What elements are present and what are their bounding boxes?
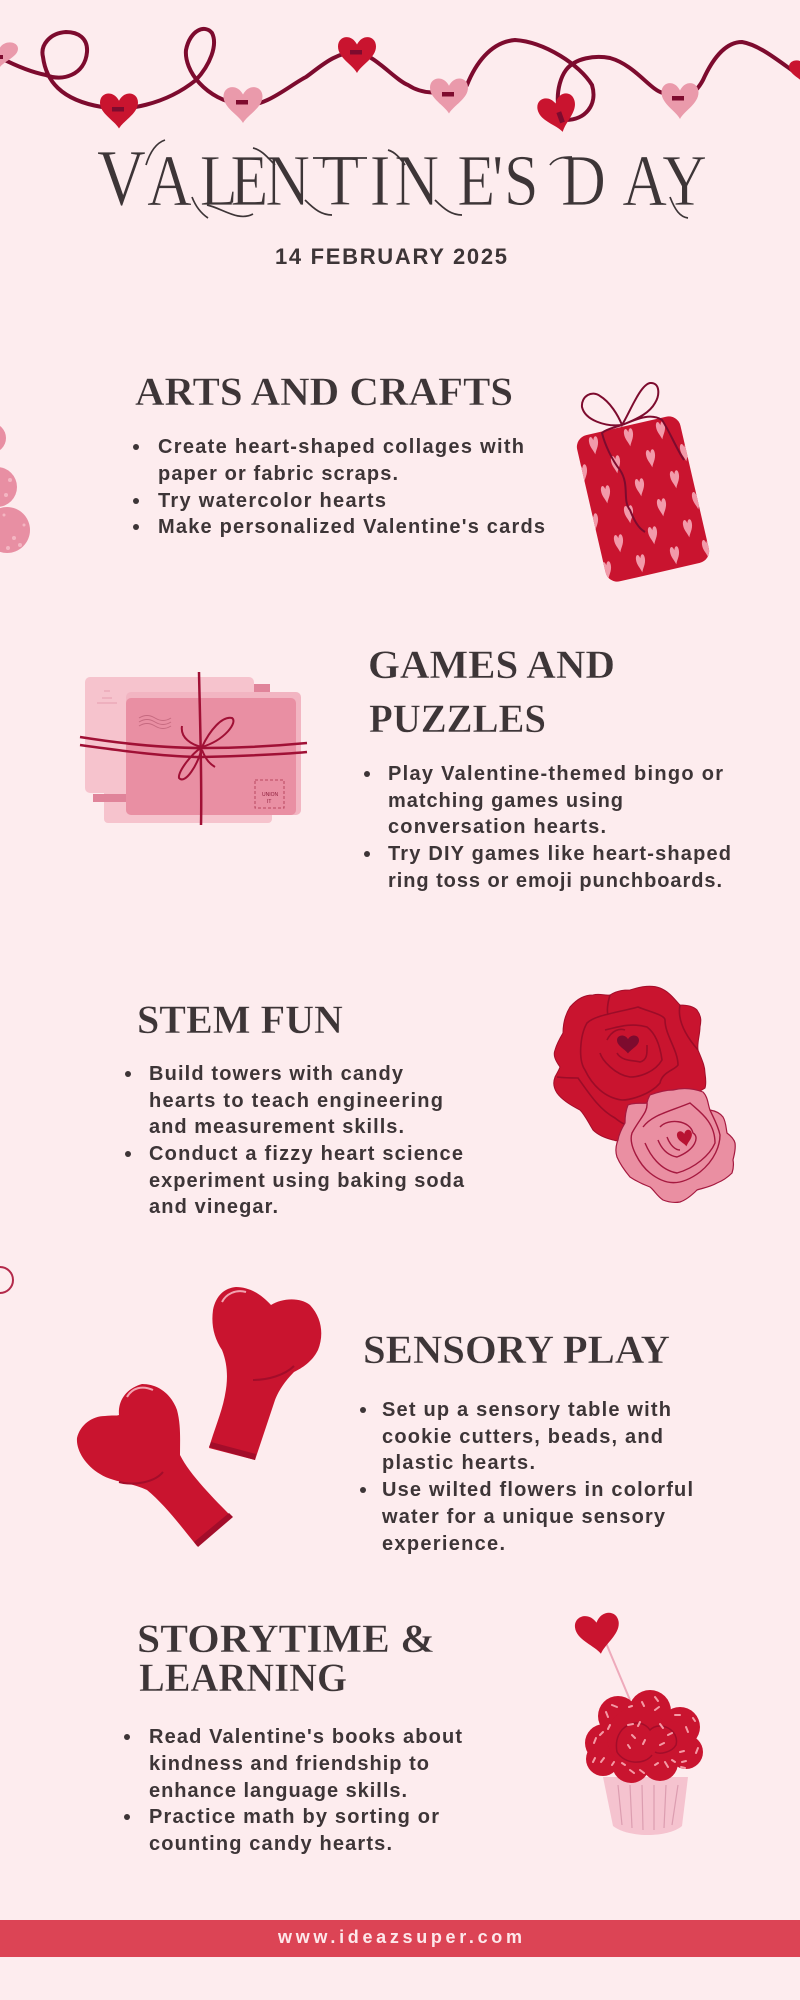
list: arts and crafts: Try watercolor hearts <box>158 490 386 512</box>
list: stem fun: experiment using baking soda <box>149 1170 465 1192</box>
decoration: pink beads at left edge <box>0 423 30 553</box>
list: sensory play: experience. <box>382 1533 505 1555</box>
list: sensory play <box>360 1399 693 1555</box>
heart: far left <box>0 42 18 67</box>
heading: storytime and learning: STORYTIME & <box>137 1616 435 1661</box>
heading: games and puzzles <box>368 642 615 741</box>
heading: stem fun: STEM FUN <box>137 997 343 1042</box>
list: stem fun: hearts to teach engineering <box>149 1090 443 1112</box>
heading: games and puzzles: PUZZLES <box>369 696 546 741</box>
panel: games and puzzles <box>80 642 731 892</box>
icon: cupcake <box>574 1611 703 1835</box>
icon: tied letters: IT <box>267 799 271 805</box>
list: stem fun: Conduct a fizzy heart science <box>149 1143 463 1165</box>
list: games and puzzles <box>364 763 731 892</box>
list: storytime and learning: Read Valentine's books about <box>149 1726 462 1748</box>
title: DAY <box>561 140 707 221</box>
date: 14 FEBRUARY 2025 <box>275 244 507 269</box>
heading: games and puzzles: GAMES AND <box>368 642 615 687</box>
balloon: upper <box>209 1287 321 1460</box>
panel: sensory play <box>77 1287 693 1555</box>
list: storytime and learning: enhance language skills. <box>149 1780 407 1802</box>
list: storytime and learning: kindness and friendship to <box>149 1753 429 1775</box>
icon: wrapped gift <box>574 383 713 584</box>
heading: storytime and learning: LEARNING <box>139 1655 347 1700</box>
balloon: lower <box>77 1384 233 1547</box>
pink rose <box>616 1089 735 1202</box>
list: sensory play: Use wilted flowers in colorful <box>382 1479 693 1501</box>
list: stem fun: Build towers with candy <box>149 1063 404 1085</box>
title <box>97 135 707 223</box>
list: arts and crafts: Make personalized Valentine's cards <box>158 516 545 538</box>
footer bar <box>0 1920 800 1957</box>
list: storytime and learning: Practice math by sorting or <box>149 1806 439 1828</box>
garland of hearts <box>0 29 800 137</box>
panel: storytime and learning <box>124 1611 703 1855</box>
icon: tied letters: UNION <box>262 792 278 798</box>
title: ALENTINE'S <box>147 140 539 221</box>
icon: tied letters <box>80 672 307 825</box>
decoration: ring at left edge <box>0 1267 13 1293</box>
panel: stem fun <box>125 986 735 1218</box>
list: games and puzzles: Try DIY games like heart-shaped <box>388 843 731 865</box>
heading: storytime and learning <box>137 1616 435 1700</box>
list: arts and crafts: paper or fabric scraps. <box>158 463 398 485</box>
icon: heart balloons <box>77 1287 321 1547</box>
list: sensory play: Set up a sensory table with <box>382 1399 671 1421</box>
list: games and puzzles: matching games using <box>388 790 623 812</box>
list: games and puzzles: Play Valentine-themed bingo or <box>388 763 723 785</box>
heading: sensory play: SENSORY PLAY <box>363 1327 670 1372</box>
panel: arts and crafts <box>133 369 713 584</box>
list: stem fun <box>125 1063 465 1218</box>
list: games and puzzles: ring toss or emoji punchboards. <box>388 870 722 892</box>
title: V <box>97 135 146 223</box>
list: sensory play: plastic hearts. <box>382 1452 535 1474</box>
website url: www.ideazsuper.com <box>277 1927 522 1947</box>
list: storytime and learning <box>124 1726 462 1855</box>
icon: roses <box>554 986 735 1202</box>
list: sensory play: water for a unique sensory <box>381 1506 666 1528</box>
red rose <box>554 986 706 1141</box>
list: arts and crafts <box>133 436 545 538</box>
list: storytime and learning: counting candy hearts. <box>149 1833 392 1855</box>
list: games and puzzles: conversation hearts. <box>388 816 606 838</box>
heading: arts and crafts: ARTS AND CRAFTS <box>135 369 513 414</box>
list: arts and crafts: Create heart-shaped collages with <box>158 436 524 458</box>
list: stem fun: and measurement skills. <box>149 1116 404 1138</box>
list: stem fun: and vinegar. <box>149 1196 278 1218</box>
list: sensory play: cookie cutters, beads, and <box>382 1426 663 1448</box>
